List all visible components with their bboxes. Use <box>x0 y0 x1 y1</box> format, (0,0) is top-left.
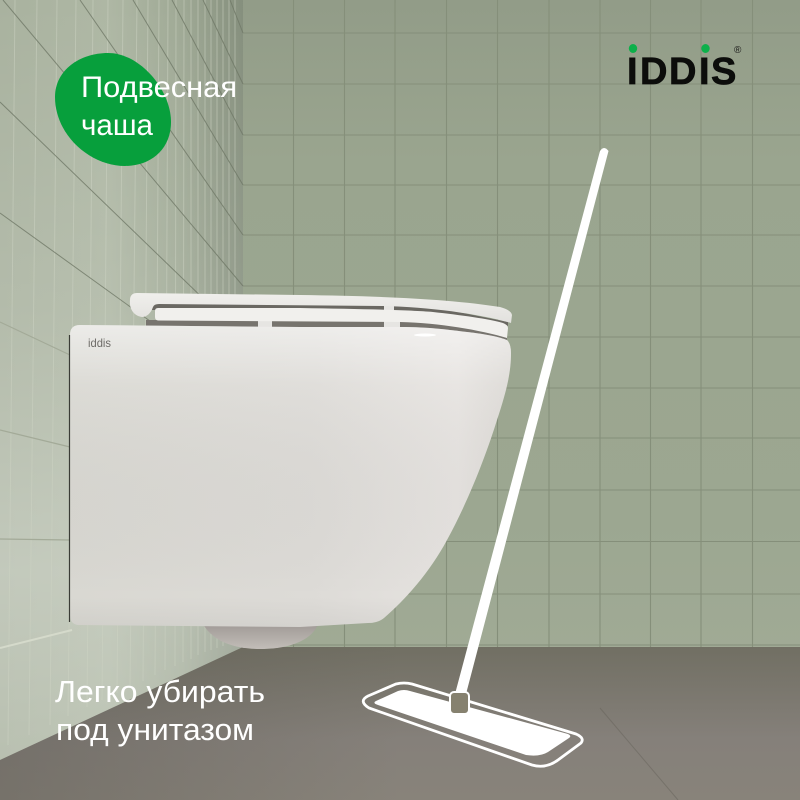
caption: easy to clean: Легко убирать <box>55 674 265 709</box>
mop head outline <box>363 683 582 766</box>
toilet seat <box>155 308 508 338</box>
toilet logo: iddis <box>88 336 111 350</box>
side wall tiles <box>0 0 243 762</box>
toilet <box>70 293 512 649</box>
toilet highlight <box>414 334 436 336</box>
mop connector <box>450 692 469 714</box>
toilet body <box>70 325 511 627</box>
logo <box>627 44 742 93</box>
toilet body shading <box>70 325 511 627</box>
mop handle <box>455 148 608 694</box>
toilet drain dome <box>203 624 318 649</box>
floor <box>0 647 800 800</box>
green blob label <box>55 53 171 166</box>
heading: suspended bowl: чаша <box>81 109 153 142</box>
logo wordmark: IDDIS <box>627 51 736 93</box>
toilet hinge posts <box>258 305 400 330</box>
logo green dots <box>629 44 710 53</box>
icon: mop <box>363 148 608 766</box>
shadow gap between seat and bowl <box>146 320 507 342</box>
back wall tiles <box>243 0 800 650</box>
toilet left edge shadow <box>68 335 70 622</box>
mop pad <box>374 690 570 756</box>
shadow gap between lid and seat <box>152 303 508 326</box>
toilet lid <box>130 293 512 323</box>
logo registered mark: ® <box>734 45 742 56</box>
caption: easy to clean: под унитазом <box>56 712 254 747</box>
heading: suspended bowl: Подвесная <box>81 71 237 104</box>
